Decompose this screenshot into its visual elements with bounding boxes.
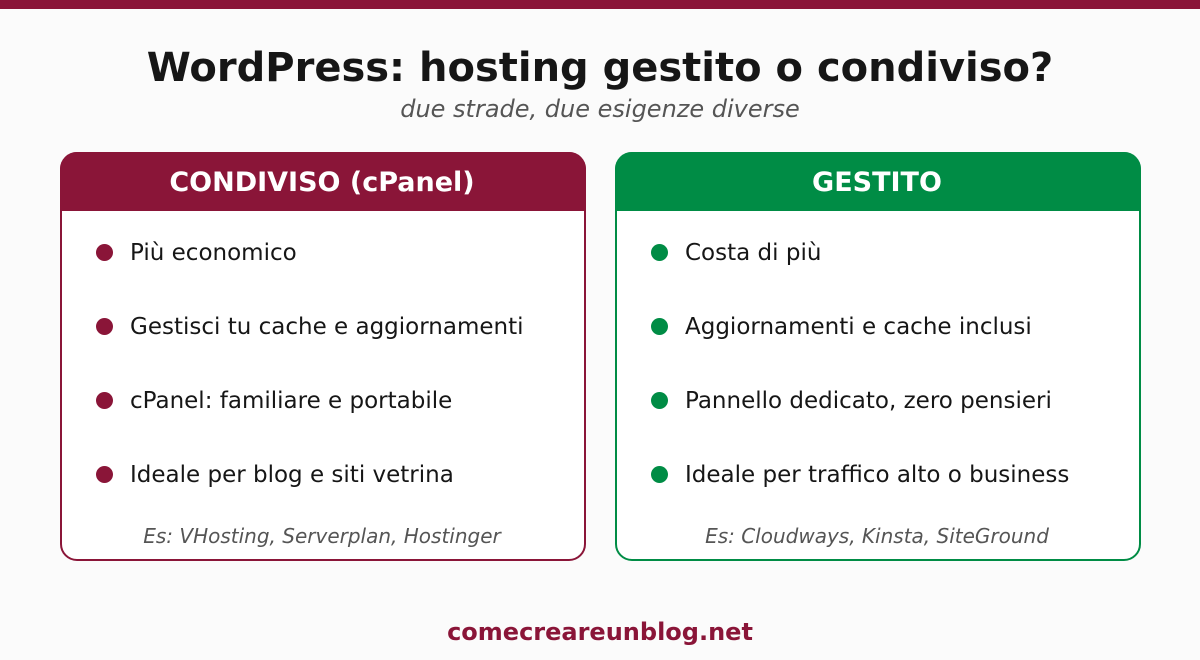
panel: condiviso — [60, 152, 586, 560]
subtitle: due strade, due esigenze diverse — [400, 95, 800, 123]
heading: condiviso: CONDIVISO (cPanel) — [169, 167, 475, 198]
title: WordPress: hosting gestito o condiviso? — [147, 45, 1053, 91]
examples: gestito: Es: Cloudways, Kinsta, SiteGround — [705, 524, 1049, 548]
panel header: gestito — [615, 152, 1141, 211]
bullet: gestisci tu: Gestisci tu cache e aggiornamenti — [130, 314, 524, 340]
panel header: condiviso — [60, 152, 586, 211]
bullet: aggiornamenti: Aggiornamenti e cache inclusi — [685, 314, 1032, 340]
panel background — [61, 153, 585, 560]
bullet: cpanel: cPanel: familiare e portabile — [130, 388, 452, 414]
bullet: costa di più: Costa di più — [685, 240, 821, 266]
footer site name: comecreareunblog.net — [447, 618, 753, 646]
panel background — [616, 153, 1140, 560]
bullet: più economico: Più economico — [130, 240, 297, 266]
heading: gestito: GESTITO — [812, 167, 942, 198]
panel: gestito — [615, 152, 1141, 560]
bullet: ideale per blog: Ideale per blog e siti vetrina — [130, 462, 454, 488]
bullet: ideale per traffico: Ideale per traffico alto o business — [685, 462, 1069, 488]
examples: condiviso: Es: VHosting, Serverplan, Hostinger — [143, 524, 503, 548]
bullet: pannello: Pannello dedicato, zero pensieri — [685, 388, 1052, 414]
top accent bar — [0, 0, 1200, 9]
